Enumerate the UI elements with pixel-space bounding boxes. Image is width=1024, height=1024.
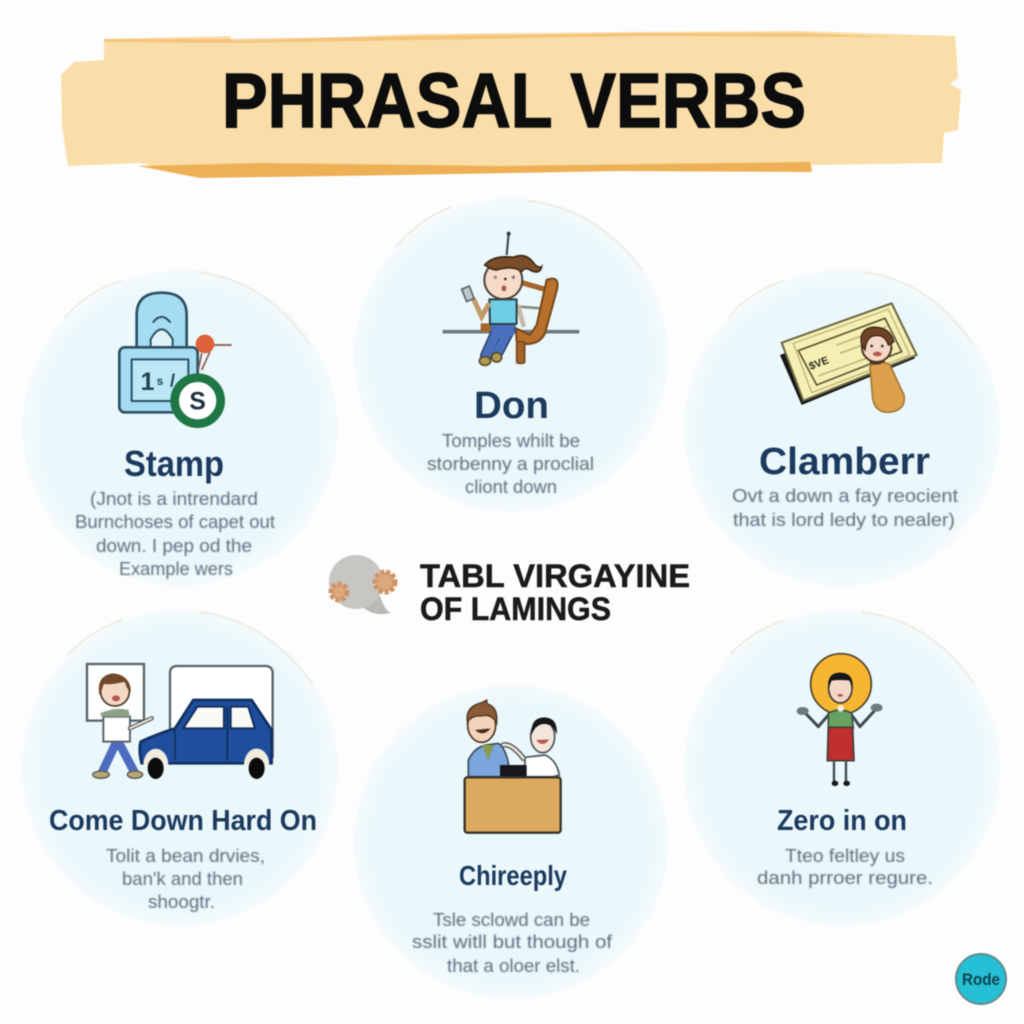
text block: Stamp: down. I pep od the xyxy=(96,536,252,556)
heading: Stamp: Stamp xyxy=(124,443,224,484)
center heading xyxy=(420,558,690,627)
icon: person and blue car xyxy=(87,664,273,779)
heading: Come Down Hard On: Come Down Hard On xyxy=(49,805,317,837)
icon: woman with halo xyxy=(797,654,883,786)
icon: cheque and person xyxy=(780,303,917,412)
panel: Clamberr xyxy=(684,270,1000,586)
text block: Come Down Hard On: shoogtr. xyxy=(148,892,215,912)
title banner xyxy=(61,31,961,178)
heading: Chireeply: Chireeply xyxy=(459,860,567,891)
text block: Chireeply: Tsle sclowd can be xyxy=(433,910,590,930)
heading: Clamberr: Clamberr xyxy=(759,441,930,483)
icon: lock and coin: s xyxy=(157,374,164,388)
panel: Stamp xyxy=(22,270,338,586)
text block: Zero in on: danh prroer regure. xyxy=(757,868,933,888)
text block: Zero in on xyxy=(757,846,933,888)
text block: Don xyxy=(427,431,594,497)
text block: Stamp: Example wers xyxy=(119,559,233,579)
center heading: OF LAMINGS xyxy=(420,591,611,627)
text block: Come Down Hard On: ban'k and then xyxy=(122,869,243,889)
text block: Stamp: (Jnot is a intrendard xyxy=(90,489,258,509)
text block: Come Down Hard On xyxy=(106,846,265,912)
text block: Zero in on: Tteo feltley us xyxy=(785,846,905,866)
text block: Don: storbenny a proclial xyxy=(427,454,594,474)
text block: Chireeply: sslit witll but though of xyxy=(412,932,613,952)
panel: Chireeply xyxy=(354,685,668,999)
icon: person on chair xyxy=(443,232,579,365)
icon: lock and coin: S xyxy=(189,388,206,415)
panel: Zero in on xyxy=(684,610,1000,926)
icon: cheque and person: $VE xyxy=(807,354,831,373)
text block: Clamberr: Ovt a down a fay reocient xyxy=(732,486,958,506)
text block: Clamberr xyxy=(732,486,958,530)
text block: Don: Tomples whilt be xyxy=(442,431,580,451)
badge: Rode xyxy=(962,970,1000,989)
title: PHRASAL VERBS xyxy=(222,58,806,144)
center label xyxy=(329,555,690,627)
icon: lock and coin: 1 xyxy=(141,369,155,396)
text block: Stamp: Burnchoses of capet out xyxy=(75,512,275,532)
text block: Don: cliont down xyxy=(465,477,557,497)
text block: Clamberr: that is lord ledy to nealer) xyxy=(733,510,955,530)
center heading: TABL VIRGAYINE xyxy=(420,558,690,594)
heading: Don: Don xyxy=(474,385,549,427)
text block: Come Down Hard On: Tolit a bean drvies, xyxy=(106,846,265,866)
panel: Don xyxy=(354,198,668,512)
icon: lock and coin xyxy=(119,293,232,424)
text block: Chireeply: that a oloer elst. xyxy=(447,956,580,976)
panel: Come Down Hard On xyxy=(22,610,338,926)
badge xyxy=(956,954,1006,1004)
icon: speech bubble with gears xyxy=(329,555,395,614)
text block: Stamp xyxy=(75,489,275,579)
heading: Zero in on: Zero in on xyxy=(777,805,907,837)
icon: lock and coin: / xyxy=(170,371,175,391)
icon: two people at desk xyxy=(465,700,561,833)
text block: Chireeply xyxy=(412,910,613,976)
